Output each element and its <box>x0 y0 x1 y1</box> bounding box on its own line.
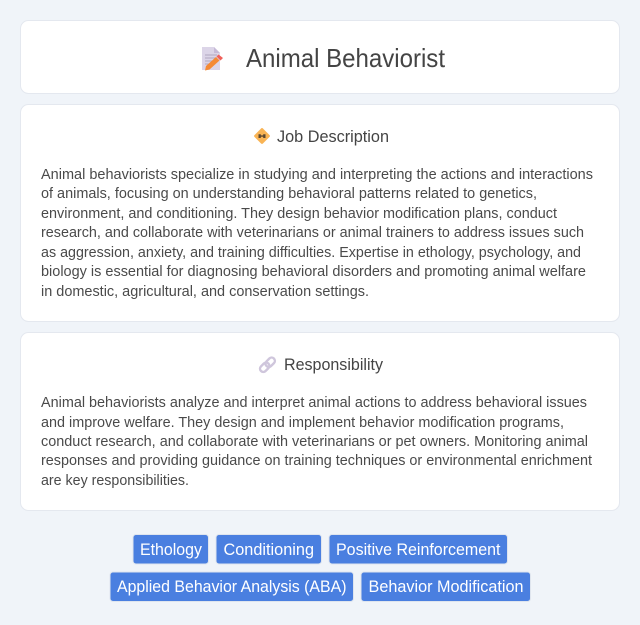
icon: document with pencil <box>202 47 223 70</box>
text block: job description: research, and collaborate with veterinarians or animal trainers to address issues such <box>41 224 584 241</box>
icon: chain link <box>259 356 276 373</box>
text block: job description: Animal behaviorists specialize in studying and interpreting the actions and interactions <box>41 166 593 183</box>
panel: job description <box>20 104 620 322</box>
panel: title card <box>20 20 620 94</box>
text block: responsibility: are key responsibilities. <box>41 472 189 489</box>
title: Animal Behaviorist <box>246 43 446 73</box>
heading: responsibility: Responsibility <box>284 356 384 374</box>
text block: job description: biology is essential for diagnosing behavioral disorders and promoting animal welfare <box>41 263 586 280</box>
tag: Ethology <box>133 534 208 564</box>
text block: responsibility: responses and providing guidance on training techniques or environmental enrichment <box>41 452 593 469</box>
text block: job description: as aggression, anxiety, and training difficulties. Expertise in ethology, psychology, and <box>41 244 581 261</box>
text block: responsibility: Animal behaviorists analyze and interpret animal actions to address behavioral issues <box>41 394 587 411</box>
panel: responsibility <box>20 332 620 510</box>
tag: Conditioning: Conditioning <box>224 541 314 559</box>
tag: Applied Behavior Analysis (ABA): Applied Behavior Analysis (ABA) <box>117 578 346 596</box>
tag: Positive Reinforcement: Positive Reinforcement <box>336 541 501 559</box>
text block: job description: environment, and conditioning. They design behavior modification plans, conduct <box>41 205 558 222</box>
text block: responsibility: conduct research, and collaborate with veterinarians or pet owners. Monitoring animal <box>41 433 588 450</box>
tag: Conditioning <box>216 534 322 564</box>
tag: Behavior Modification: Behavior Modification <box>368 578 524 596</box>
icon: orange diamond sign <box>254 128 270 144</box>
tag: Applied Behavior Analysis (ABA) <box>110 572 354 602</box>
text block: job description: of animals, focusing on understanding behavioral patterns related to genetics, <box>41 185 537 202</box>
text block: responsibility <box>41 394 593 489</box>
tag: Positive Reinforcement <box>329 534 508 564</box>
text block: responsibility: and improve welfare. They design and implement behavior modification programs, <box>41 414 564 431</box>
text block: job description <box>41 166 593 300</box>
tag: Ethology: Ethology <box>140 541 203 559</box>
text block: job description: in domestic, agricultural, and conservation settings. <box>41 283 369 300</box>
heading: job description: Job Description <box>277 128 389 146</box>
tag: Behavior Modification <box>361 572 530 602</box>
